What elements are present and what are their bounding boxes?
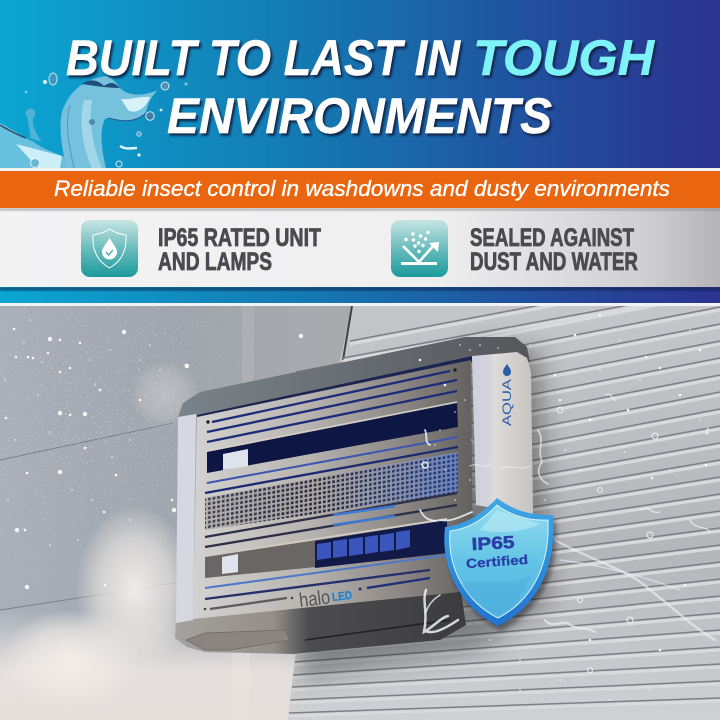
right end cap with AQUA label: AQUA [500, 379, 514, 426]
header banner [0, 0, 720, 170]
title: BUILT TO LAST IN [66, 30, 461, 86]
title: ENVIRONMENTS [167, 88, 552, 144]
title: TOUGH [473, 30, 655, 86]
front plate [193, 360, 473, 619]
unit bottom housing [175, 592, 466, 654]
left column [176, 414, 196, 623]
insect killer unit [175, 337, 533, 654]
subtitle banner [0, 168, 720, 208]
badge text: IP65 [471, 532, 515, 554]
right corrugated wall [288, 271, 720, 720]
icon: shield with water drop [81, 220, 138, 277]
feature text: sealed: DUST AND WATER [470, 248, 638, 276]
feature text: IP65 rated: AND LAMPS [158, 248, 272, 276]
icon: particles deflecting off surface [391, 220, 448, 277]
panel: features band [0, 208, 720, 306]
title [66, 30, 655, 144]
logo: halo LED [299, 590, 352, 607]
icon: water drop [503, 364, 511, 376]
feature text: IP65 rated [158, 224, 321, 276]
feature text: sealed [470, 224, 638, 276]
upper window [207, 403, 458, 473]
badge text [466, 536, 528, 568]
water splash strands [420, 394, 715, 672]
logo: halo LED: LED [331, 590, 353, 604]
shield badge: IP65 certified [444, 498, 557, 631]
wall shadow around the unit [300, 345, 550, 680]
badge text: Certified [466, 552, 529, 571]
fine spray on the concrete [0, 306, 256, 582]
perforated panel [205, 452, 458, 530]
right end cap with AQUA label [472, 352, 533, 515]
feature text: IP65 rated: IP65 RATED UNIT [158, 224, 321, 252]
feature text: sealed: SEALED AGAINST [470, 224, 634, 252]
subtitle banner: Reliable insect control in washdowns and dusty environments [54, 176, 670, 201]
logo: halo LED: halo [298, 586, 331, 612]
dust cloud [0, 360, 300, 720]
left concrete wall [0, 306, 360, 720]
water droplets [5, 315, 706, 700]
lower window with lamps [205, 520, 447, 578]
illustration: water splash [0, 73, 188, 168]
unit lid [178, 337, 530, 417]
photo: unit on wall in washdown [0, 271, 720, 720]
